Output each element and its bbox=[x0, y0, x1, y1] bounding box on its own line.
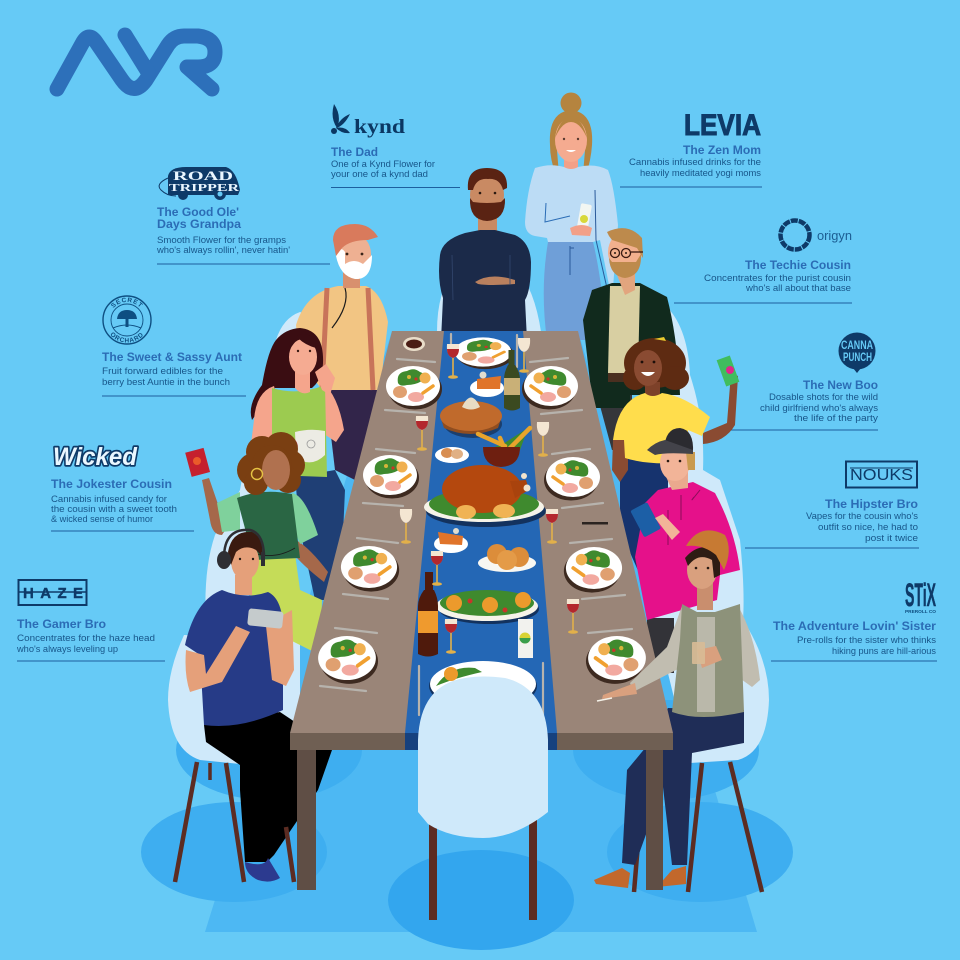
text: The Zen Mom bbox=[620, 145, 762, 187]
turkey platter bbox=[424, 465, 546, 527]
text: The New Boo: The New Boo bbox=[803, 380, 878, 392]
logo: Canna Punch: PUNCH bbox=[843, 350, 872, 364]
wine glass 9 bbox=[445, 619, 457, 654]
logo: Stix: PREROLL CO bbox=[905, 609, 937, 614]
text: The Jokester Cousin: & wicked sense of humor bbox=[51, 513, 153, 524]
logo: Canna Punch: CANNA bbox=[841, 338, 873, 352]
logo: Hipster brand bbox=[846, 462, 917, 488]
text: The Dad: The Dad bbox=[331, 147, 378, 159]
wine glass 4 bbox=[537, 422, 549, 457]
text: The Zen Mom: heavily meditated yogi moms bbox=[640, 167, 761, 178]
person: Gamer Bro bbox=[185, 530, 332, 882]
meal plate: right 3 bbox=[564, 547, 622, 593]
logo: Origyn bbox=[780, 220, 852, 250]
wine glass 5 bbox=[400, 509, 412, 544]
text: The Adventure Lovin' Sister bbox=[771, 621, 937, 661]
text: The Hipster Bro: Vapes for the cousin who's bbox=[806, 510, 918, 521]
drink can bbox=[518, 619, 533, 658]
wine bottle: white bbox=[504, 350, 520, 410]
person: Hipster Bro bbox=[630, 428, 740, 673]
text: The Dad bbox=[331, 147, 460, 188]
meal plate: left 4 bbox=[318, 636, 378, 684]
text: The Jokester Cousin bbox=[51, 479, 194, 531]
person: Zen Mom bbox=[525, 92, 618, 340]
meal plate: top centre bbox=[455, 337, 513, 369]
text: The Adventure Lovin' Sister: The Adventure Lovin' Sister bbox=[773, 621, 937, 633]
text: The Techie Cousin: The Techie Cousin bbox=[745, 260, 851, 272]
text: The Sweet & Sassy Aunt: berry best Auntie in the bunch bbox=[102, 376, 230, 387]
text: The New Boo: Dosable shots for the wild bbox=[769, 391, 878, 402]
text: The Jokester Cousin: The Jokester Cousin bbox=[51, 479, 172, 491]
pie bbox=[440, 398, 502, 438]
text: The Dad: One of a Kynd Flower for bbox=[331, 158, 435, 169]
wine glass 8 bbox=[567, 599, 579, 634]
pumpkin slice bottom bbox=[434, 528, 468, 553]
text: The Gamer Bro: who's always leveling up bbox=[16, 643, 118, 654]
cutlery bbox=[320, 334, 632, 715]
meal plate: right 1 bbox=[522, 366, 578, 410]
text: The Sweet & Sassy Aunt bbox=[102, 352, 246, 396]
logo: Stix bbox=[905, 577, 937, 614]
text: The Gamer Bro: Concentrates for the haze head bbox=[17, 632, 155, 643]
salad platter bbox=[436, 590, 539, 624]
meal plate: left 3 bbox=[341, 546, 399, 592]
wine bottle: red bbox=[418, 572, 438, 656]
logo: Road Tripper bbox=[159, 167, 241, 200]
logo: Road Tripper: TRIPPER bbox=[169, 182, 241, 194]
text: The Good Ole' Days Grandpa: The Good Ole' bbox=[157, 207, 239, 219]
logo: kynd bbox=[331, 104, 405, 138]
text: The New Boo bbox=[728, 380, 878, 430]
chair backs behind diners bbox=[168, 265, 769, 765]
text: The Dad: your one of a kynd dad bbox=[331, 168, 428, 179]
text: The Hipster Bro: post it twice bbox=[865, 532, 918, 543]
chair legs bbox=[175, 762, 762, 892]
rolls plate bbox=[478, 544, 536, 572]
text: The Good Ole' Days Grandpa: Smooth Flower for the gramps bbox=[157, 234, 286, 245]
text: The Jokester Cousin: Cannabis infused candy for bbox=[51, 493, 167, 504]
text: The Gamer Bro: The Gamer Bro bbox=[17, 619, 106, 631]
logo: Secret Orchard bbox=[102, 295, 152, 345]
wine glass 6 bbox=[546, 509, 558, 544]
logo: Secret Orchard: ORCHARD bbox=[110, 332, 142, 342]
logo: Levia: LEVIA bbox=[684, 109, 761, 142]
logo: Road Tripper: ROAD bbox=[173, 168, 233, 183]
text: The New Boo: child girlfriend who's always bbox=[760, 402, 878, 413]
dark dash bbox=[582, 522, 608, 524]
wine glass 2 bbox=[447, 344, 459, 379]
text: The Techie Cousin: who's all about that base bbox=[745, 282, 851, 293]
front chair bbox=[418, 676, 548, 920]
logo: AYR bbox=[57, 35, 215, 89]
text: The Techie Cousin: Concentrates for the purist cousin bbox=[704, 272, 851, 283]
meal plate: right 4 bbox=[586, 636, 646, 684]
meal plate: right 2 bbox=[544, 457, 600, 500]
text: The Zen Mom: The Zen Mom bbox=[683, 145, 761, 157]
wine glass 3 bbox=[416, 416, 428, 451]
logo: Canna Punch bbox=[838, 332, 876, 373]
dining table bbox=[290, 331, 673, 890]
text: The Gamer Bro bbox=[16, 619, 165, 661]
logo: Origyn: origyn bbox=[817, 228, 852, 243]
floor shadow bbox=[141, 331, 793, 950]
person: Adventure Lovin' Sister bbox=[597, 530, 760, 717]
logo: kynd: kynd bbox=[354, 116, 405, 138]
text: The Good Ole' Days Grandpa: who's always rollin', never hatin' bbox=[156, 244, 290, 255]
text: The Jokester Cousin: the cousin with a sweet tooth bbox=[51, 503, 177, 514]
text: The Hipster Bro bbox=[745, 499, 919, 548]
person: Techie Cousin bbox=[583, 228, 680, 450]
person: New Boo bbox=[612, 337, 739, 575]
logo: Hipster brand: NOUKS bbox=[850, 467, 913, 484]
wine glass 1 bbox=[518, 338, 530, 373]
text: The New Boo: the life of the party bbox=[794, 412, 878, 423]
text: The Sweet & Sassy Aunt: The Sweet & Sassy Aunt bbox=[102, 352, 242, 364]
roll plate bbox=[435, 447, 469, 463]
logo: Haze: HAZE bbox=[23, 585, 83, 602]
person: Sweet Aunt bbox=[250, 328, 345, 600]
text: The Techie Cousin bbox=[674, 260, 852, 303]
text: The Zen Mom: Cannabis infused drinks for the bbox=[629, 156, 761, 167]
text: The Sweet & Sassy Aunt: Fruit forward edibles for the bbox=[102, 365, 223, 376]
gravy bowl bbox=[403, 337, 425, 351]
person: Jokester Cousin bbox=[185, 432, 357, 655]
text: The Hipster Bro: outfit so nice, he had to bbox=[818, 521, 918, 532]
text: The Good Ole' Days Grandpa: Days Grandpa bbox=[157, 219, 242, 231]
person legs: Adventure Sister bbox=[594, 708, 744, 888]
meal plate: left 2 bbox=[363, 455, 419, 498]
person: Grandpa bbox=[296, 224, 388, 485]
text: The Good Ole' Days Grandpa bbox=[156, 207, 330, 264]
pumpkin slice top bbox=[470, 372, 504, 397]
meal plate: left 1 bbox=[386, 366, 442, 410]
logo: Wicked: Wicked bbox=[53, 443, 138, 471]
text: The Adventure Lovin' Sister: Pre-rolls for the sister who thinks bbox=[797, 634, 936, 645]
logo: Haze bbox=[18, 580, 86, 605]
corn bowl bbox=[478, 428, 530, 467]
text: The Hipster Bro: The Hipster Bro bbox=[825, 499, 918, 511]
logo: Secret Orchard: SECRET bbox=[111, 298, 143, 308]
person: The Dad bbox=[439, 168, 531, 340]
text: The Adventure Lovin' Sister: hiking puns are hill-arious bbox=[832, 645, 936, 656]
wine glass 7 bbox=[431, 551, 443, 586]
front plate bbox=[429, 661, 537, 710]
